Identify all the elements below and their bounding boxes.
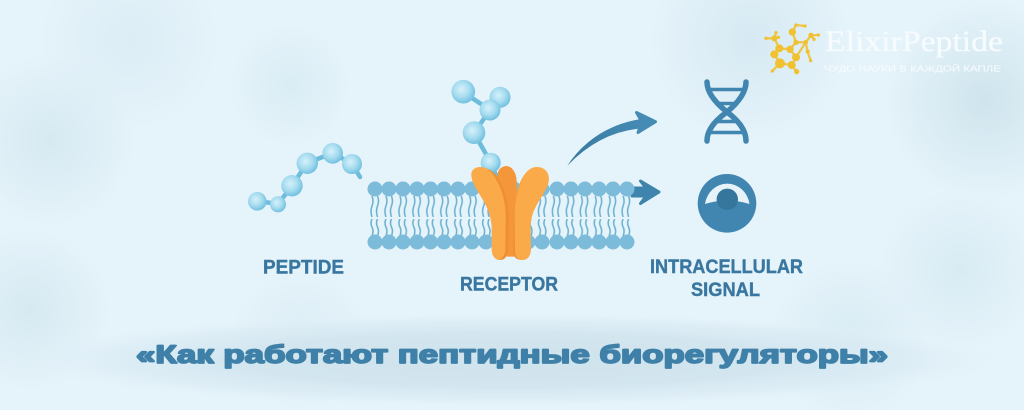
bound peptide molecule xyxy=(452,80,510,178)
logo tagline: ЧУДО НАУКИ В КАЖДОЙ КАПЛЕ xyxy=(824,62,1001,74)
lipid heads top xyxy=(368,182,634,196)
lipid heads bottom xyxy=(368,234,634,250)
logo name: ElixirPeptide xyxy=(825,25,1003,58)
receptor xyxy=(471,166,549,260)
intracellular signal label xyxy=(650,256,803,301)
curved arrow xyxy=(567,112,656,166)
icon: cell xyxy=(698,174,756,233)
title: «Как работают пептидные биорегуляторы» xyxy=(136,341,888,369)
logo mark xyxy=(764,23,820,74)
receptor label: RECEPTOR xyxy=(460,274,558,296)
logo xyxy=(764,23,1003,74)
intracellular signal label: SIGNAL xyxy=(691,279,760,301)
peptide molecule xyxy=(248,143,362,212)
title halo xyxy=(12,312,1012,408)
straight arrow xyxy=(632,181,659,204)
lipid tails xyxy=(368,196,633,217)
intracellular signal label: INTRACELLULAR xyxy=(650,256,803,278)
peptide label: PEPTIDE xyxy=(263,256,344,278)
membrane xyxy=(368,182,634,250)
icon: dna xyxy=(707,82,746,141)
